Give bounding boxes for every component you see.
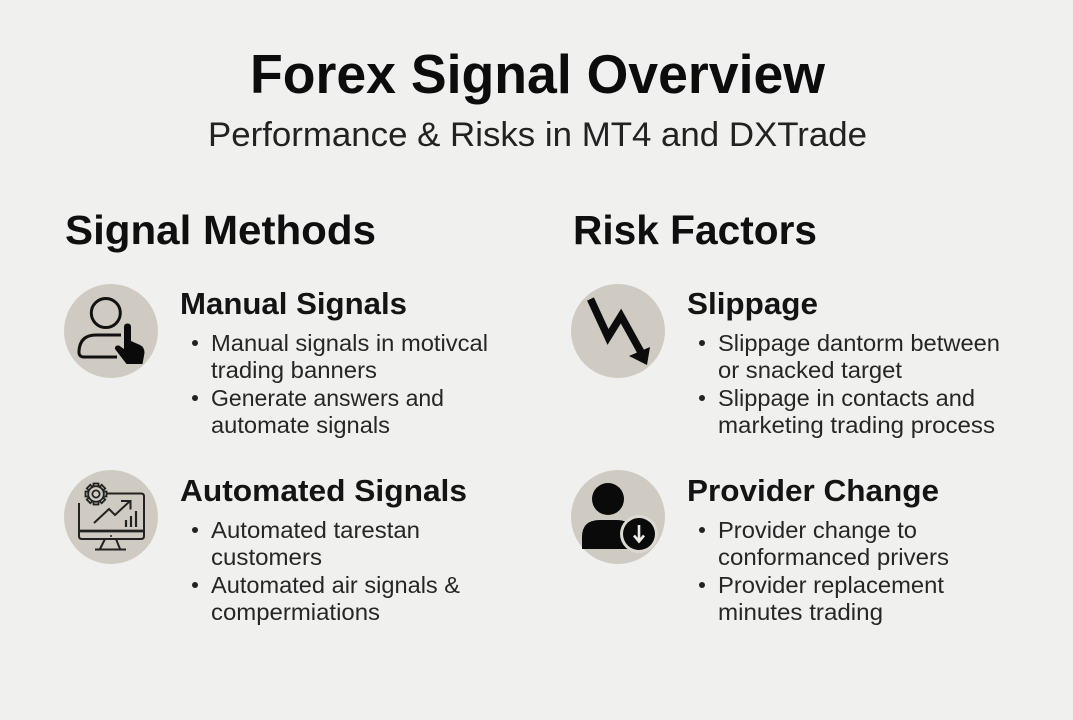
bullet list: or snacked target — [718, 357, 903, 383]
bullet list: compermiations — [211, 599, 380, 625]
item heading: Automated Signals — [180, 473, 467, 508]
bullet list: customers — [211, 544, 322, 570]
bullet list: Generate answers and — [211, 385, 444, 411]
bullet list: conformanced privers — [718, 544, 949, 570]
bullet list — [699, 517, 949, 625]
bullet list: Slippage dantorm between — [718, 330, 1000, 356]
bullet list: trading banners — [211, 357, 377, 383]
subtitle: Performance & Risks in MT4 and DXTrade — [208, 116, 867, 154]
title: Forex Signal Overview — [250, 43, 825, 105]
bullet list — [192, 517, 460, 625]
icon: person with pointing hand — [64, 284, 158, 378]
panel: Manual Signals — [64, 284, 488, 438]
item heading: Manual Signals — [180, 286, 407, 321]
item heading: Slippage — [687, 286, 818, 321]
bullet list: minutes trading — [718, 599, 883, 625]
bullet list: marketing trading process — [718, 412, 995, 438]
bullet list — [192, 330, 488, 438]
icon: monitor with gear and chart — [64, 470, 158, 564]
bullet list: Provider change to — [718, 517, 917, 543]
bullet list: Provider replacement — [718, 572, 945, 598]
panel: Provider Change — [571, 470, 949, 625]
bullet list: Manual signals in motivcal — [211, 330, 488, 356]
bullet list: Automated tarestan — [211, 517, 420, 543]
bullet list: Slippage in contacts and — [718, 385, 975, 411]
bullet list: automate signals — [211, 412, 390, 438]
bullet list: Automated air signals & — [211, 572, 460, 598]
item heading: Provider Change — [687, 473, 939, 508]
panel: Slippage — [571, 284, 1000, 438]
panel: Automated Signals — [64, 470, 467, 625]
heading: Signal Methods: Signal Methods — [65, 207, 376, 253]
icon: falling zigzag arrow — [571, 284, 665, 378]
icon: person with download badge — [571, 470, 665, 564]
bullet list — [699, 330, 1000, 438]
heading: Risk Factors: Risk Factors — [573, 207, 817, 253]
